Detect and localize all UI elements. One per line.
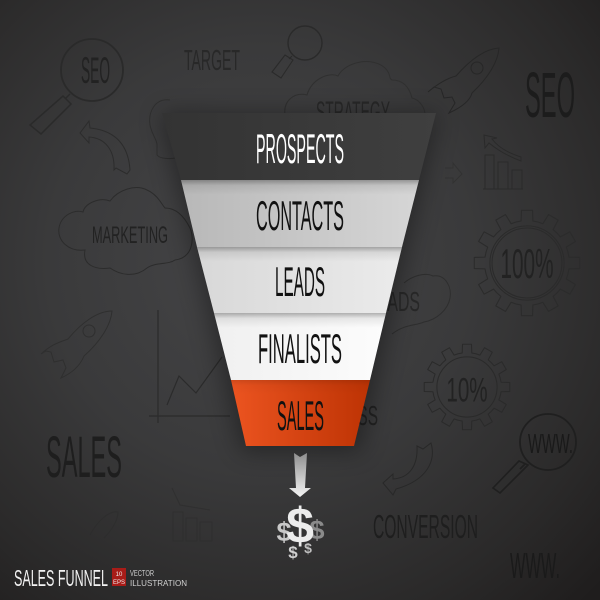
funnel band: sales: SALES bbox=[277, 392, 324, 439]
icon: gear 100% bbox=[474, 210, 580, 316]
footer: sales funnel title: SALES FUNNEL bbox=[14, 565, 108, 591]
icon: SEO magnifier bbox=[30, 39, 123, 134]
icon: faint rocket bottom bbox=[90, 512, 118, 538]
icon: dollar signs bbox=[276, 498, 325, 562]
funnel band: prospects: PROSPECTS bbox=[256, 125, 344, 172]
funnel band: prospects bbox=[162, 113, 436, 180]
icon: strategy cloud: STRATEGY bbox=[316, 96, 390, 129]
label: partial business word: BUSINESS bbox=[300, 400, 378, 431]
icon: curved arrow bottom right bbox=[383, 443, 432, 495]
background doodles: TARGET bbox=[184, 45, 240, 77]
label: marketing: MARKETING bbox=[92, 222, 168, 249]
icon: small right arrow bbox=[445, 163, 462, 183]
funnel band: contacts: CONTACTS bbox=[256, 192, 344, 239]
line chart bbox=[149, 310, 230, 423]
funnel band: leads: LEADS bbox=[275, 258, 325, 305]
icon: top magnifier bbox=[272, 26, 322, 78]
icon: WWW magnifier bbox=[493, 414, 576, 493]
arrow down bbox=[289, 453, 311, 497]
footer: vector illustration bbox=[130, 568, 187, 588]
label: 10%: 10% bbox=[446, 372, 488, 410]
icon: faint lightbulb behind funnel bbox=[150, 100, 176, 159]
icon: rocket left bbox=[41, 311, 112, 378]
icon: dollar signs: $ bbox=[288, 543, 298, 562]
icon: curved arrow left bbox=[80, 121, 130, 174]
footer: EPS badge bbox=[112, 568, 126, 586]
footer: vector illustration: VECTOR bbox=[130, 568, 154, 578]
icon: marketing cloud bbox=[59, 188, 192, 274]
icon: dollar signs: $ bbox=[276, 517, 292, 547]
icon: faint bar chart bottom bbox=[172, 488, 212, 541]
sales funnel bbox=[162, 113, 436, 446]
icon: leads cloud bbox=[368, 274, 450, 334]
funnel band: finalists bbox=[214, 313, 386, 380]
icon: dollar signs: $ bbox=[309, 515, 325, 545]
background doodles: SALES bbox=[46, 425, 122, 490]
footer: EPS badge: 10 bbox=[116, 572, 123, 578]
label: leads: LEADS bbox=[368, 286, 420, 317]
icon: rocket porthole bbox=[471, 62, 483, 74]
funnel band: finalists: FINALISTS bbox=[258, 325, 342, 372]
icon: gear 10% bbox=[424, 344, 510, 430]
funnel band: contacts bbox=[181, 180, 419, 247]
funnel band: leads bbox=[197, 247, 402, 313]
funnel drop shadow bbox=[160, 113, 438, 452]
icon: rocket top right bbox=[428, 48, 499, 113]
icon: declining bar chart bbox=[483, 135, 523, 189]
icon: dollar signs: $ bbox=[304, 540, 312, 556]
footer: EPS badge: EPS bbox=[113, 580, 125, 586]
background doodles: CONVERSION bbox=[373, 508, 478, 545]
footer: vector illustration: ILLUSTRATION bbox=[130, 578, 187, 588]
icon: dollar signs: $ bbox=[286, 498, 314, 554]
funnel band: sales bbox=[231, 380, 370, 446]
icon: strategy cloud bbox=[285, 62, 425, 129]
icon: rocket left porthole bbox=[83, 325, 95, 337]
icon: SEO magnifier: SEO bbox=[81, 50, 110, 91]
